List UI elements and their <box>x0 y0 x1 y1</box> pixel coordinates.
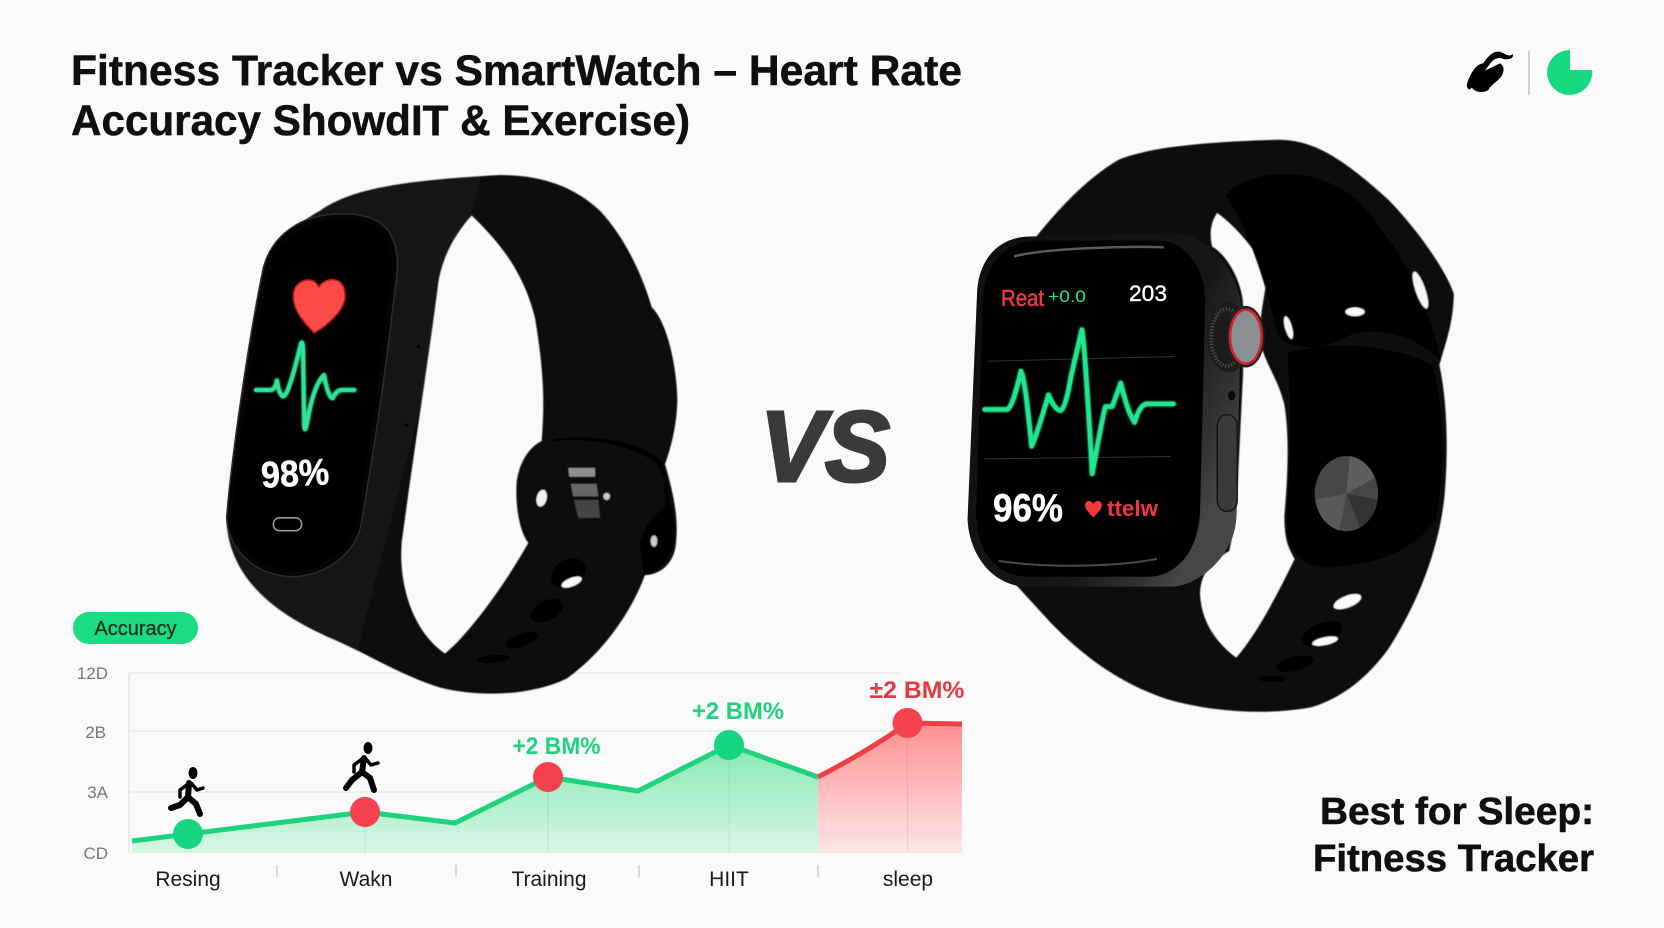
watch case and screen <box>968 233 1265 587</box>
header icons <box>1467 50 1592 95</box>
VS label: VS <box>760 391 890 503</box>
delta labels <box>512 677 964 760</box>
x axis labels: sleep <box>883 868 933 891</box>
x axis labels: Resing <box>155 868 221 891</box>
mini heart <box>1085 501 1102 517</box>
tracker face <box>227 214 397 577</box>
title: Accuracy ShowdIT & Exercise) <box>71 97 690 145</box>
accuracy area chart <box>77 664 964 891</box>
y axis labels <box>77 664 109 863</box>
strap loop shading <box>543 437 675 575</box>
x axis labels: HIIT <box>709 868 749 891</box>
dot stems <box>365 723 908 853</box>
divider <box>1528 51 1530 95</box>
icon: runner walking <box>346 742 378 790</box>
green area <box>132 745 818 853</box>
watch screen texts: 96% <box>993 487 1063 530</box>
y axis labels: 12D <box>77 664 108 683</box>
inner strap shading <box>1226 174 1441 361</box>
y axis labels: 2B <box>85 723 106 742</box>
delta labels: +2 BM% <box>692 698 784 725</box>
heartbeat line <box>985 330 1173 474</box>
watch screen texts: +0.0 <box>1048 287 1086 306</box>
red area <box>818 723 962 853</box>
icon: black glyph <box>1467 52 1513 92</box>
delta labels: ±2 BM% <box>870 677 964 704</box>
watch screen texts: 203 <box>1129 281 1167 306</box>
watch back sensor <box>1315 456 1378 531</box>
heartbeat line <box>256 342 354 429</box>
data points <box>173 708 922 849</box>
smartwatch illustration <box>968 140 1454 712</box>
watch crown <box>1207 303 1250 372</box>
chart grid and axis <box>129 673 962 853</box>
watch screen texts: ttelw <box>1107 496 1159 521</box>
watch screen texts: Reat <box>1001 285 1045 311</box>
x separators <box>277 865 818 877</box>
sensor dots <box>417 345 420 348</box>
fitness tracker illustration <box>227 175 677 694</box>
accuracy pill: Accuracy <box>94 618 177 640</box>
icon: green pie <box>1547 50 1592 95</box>
x axis labels: Training <box>511 868 587 891</box>
title <box>71 47 962 145</box>
title: Fitness Tracker vs SmartWatch – Heart Rate <box>71 47 962 95</box>
y axis labels: CD <box>83 844 108 863</box>
x axis labels <box>155 868 933 891</box>
x axis labels: Wakn <box>340 868 392 891</box>
best for sleep callout: Fitness Tracker <box>1313 838 1594 880</box>
best for sleep callout: Best for Sleep: <box>1320 791 1594 833</box>
strap holes <box>1345 307 1365 316</box>
green line <box>132 745 818 841</box>
accuracy pill <box>73 612 198 644</box>
best for sleep callout <box>1313 791 1594 880</box>
icon: heart <box>293 280 345 333</box>
watch screen texts <box>993 281 1167 530</box>
buckle bars <box>568 468 595 477</box>
home button <box>273 518 302 531</box>
watch band <box>1016 140 1454 712</box>
tracker reading: 98% <box>260 451 330 496</box>
screen grid <box>984 356 1174 459</box>
side button and mic <box>1217 415 1237 511</box>
icon: runner resting <box>171 767 203 814</box>
red line <box>818 723 962 777</box>
tracker band <box>227 175 677 694</box>
y axis labels: 3A <box>87 783 109 802</box>
delta labels: +2 BM% <box>512 733 600 760</box>
strap holes <box>546 553 590 594</box>
